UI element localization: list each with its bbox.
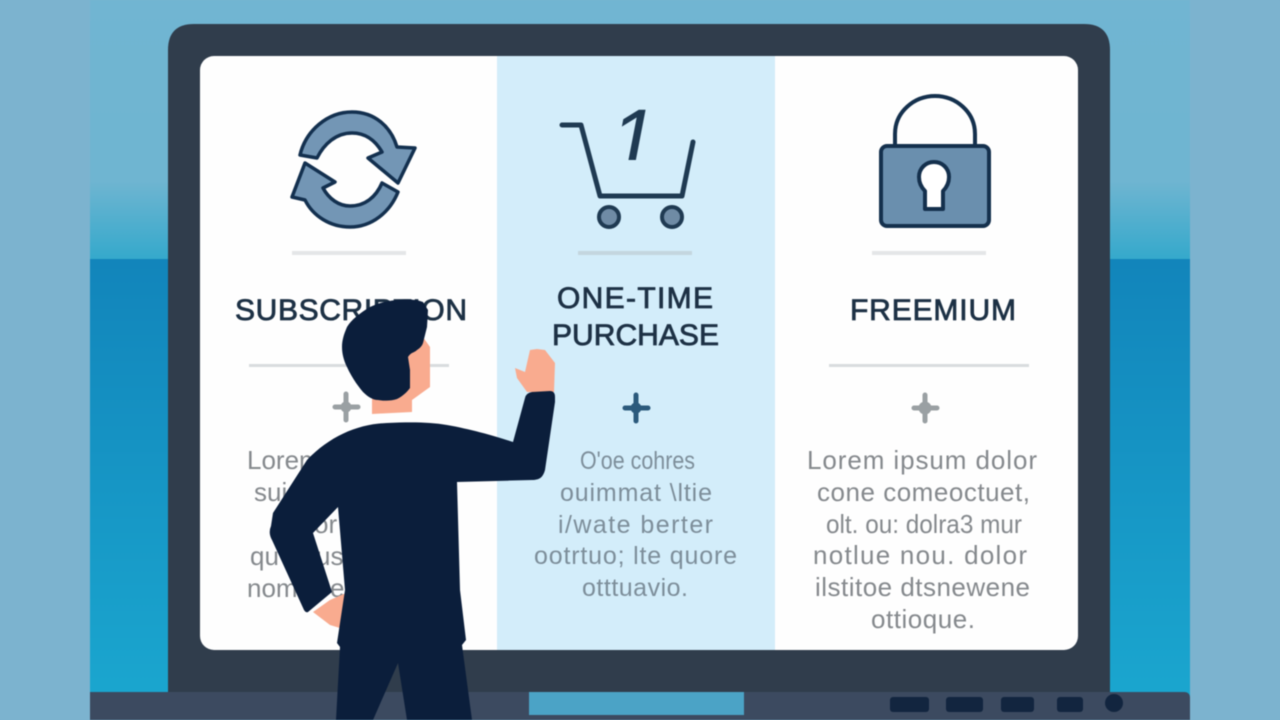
- text block: subscription description: us: [316, 541, 343, 571]
- text block: freemium description: olt. ou: dolra3 mur: [826, 509, 1022, 539]
- laptop bezel: [168, 24, 1110, 700]
- text block: freemium description: Lorem ipsum dolor: [807, 445, 1037, 475]
- panel: one-time purchase column background: [497, 56, 775, 650]
- text block: subscription description: [247, 445, 344, 603]
- divider: [578, 251, 692, 255]
- lower hand on hip: [313, 593, 346, 628]
- divider: [872, 251, 986, 255]
- trackpad: [529, 692, 744, 715]
- heading: one-time purchase: PURCHASE: [552, 319, 719, 352]
- text block: one-time purchase description: [534, 447, 737, 602]
- icon: shopping cart with number one: [562, 92, 693, 227]
- text block: subscription description: nom: [247, 573, 298, 603]
- person pointing at screen: [270, 299, 555, 720]
- text block: one-time purchase description: ouimmat \ltie: [560, 479, 712, 507]
- heading: one-time purchase: ONE-TIME: [557, 282, 713, 315]
- laptop keys and power button: [890, 694, 1123, 712]
- icon: plus sparkle: [914, 395, 937, 421]
- heading: one-time purchase: [552, 282, 719, 352]
- text block: freemium description: cone comeoctuet,: [817, 477, 1030, 507]
- divider: [249, 364, 449, 367]
- text block: one-time purchase description: ootrtuo; lte quore: [534, 542, 737, 570]
- icon: shopping cart with number one: 1: [610, 92, 657, 186]
- text block: freemium description: ilstitoe dtsnewene: [815, 572, 1030, 602]
- text block: freemium description: [807, 445, 1037, 634]
- text block: subscription description: e: [330, 573, 344, 603]
- icon: plus sparkle: [625, 395, 648, 421]
- heading: freemium: FREEMIUM: [850, 294, 1016, 327]
- divider: [829, 364, 1029, 367]
- laptop base: [90, 692, 1190, 720]
- icon: plus sparkle: [335, 394, 358, 420]
- text block: subscription description: Lorem: [247, 445, 321, 475]
- divider: [292, 251, 406, 255]
- panel: freemium: [807, 96, 1037, 634]
- torso, arms and legs: [270, 391, 555, 720]
- raised hand: [515, 349, 555, 392]
- heading: subscription: SUBSCRIPTION: [235, 294, 467, 327]
- text block: freemium description: notlue nou. dolor: [813, 540, 1027, 570]
- laptop screen: [200, 56, 1078, 650]
- text block: subscription description: or: [314, 509, 337, 539]
- text block: one-time purchase description: O'oe cohres: [580, 447, 695, 475]
- neck and ear: [372, 330, 430, 414]
- text block: subscription description: sui: [254, 477, 287, 507]
- icon: padlock: [881, 96, 989, 226]
- text block: one-time purchase description: otttuavio.: [582, 574, 688, 602]
- hair: [342, 299, 428, 401]
- text block: freemium description: ottioque.: [871, 604, 975, 634]
- panel: one-time purchase: [534, 92, 737, 602]
- text block: subscription description: qu: [250, 541, 279, 571]
- text block: one-time purchase description: i/wate berter: [558, 511, 713, 539]
- panel: subscription: [235, 112, 467, 603]
- icon: circular arrows: [292, 112, 415, 227]
